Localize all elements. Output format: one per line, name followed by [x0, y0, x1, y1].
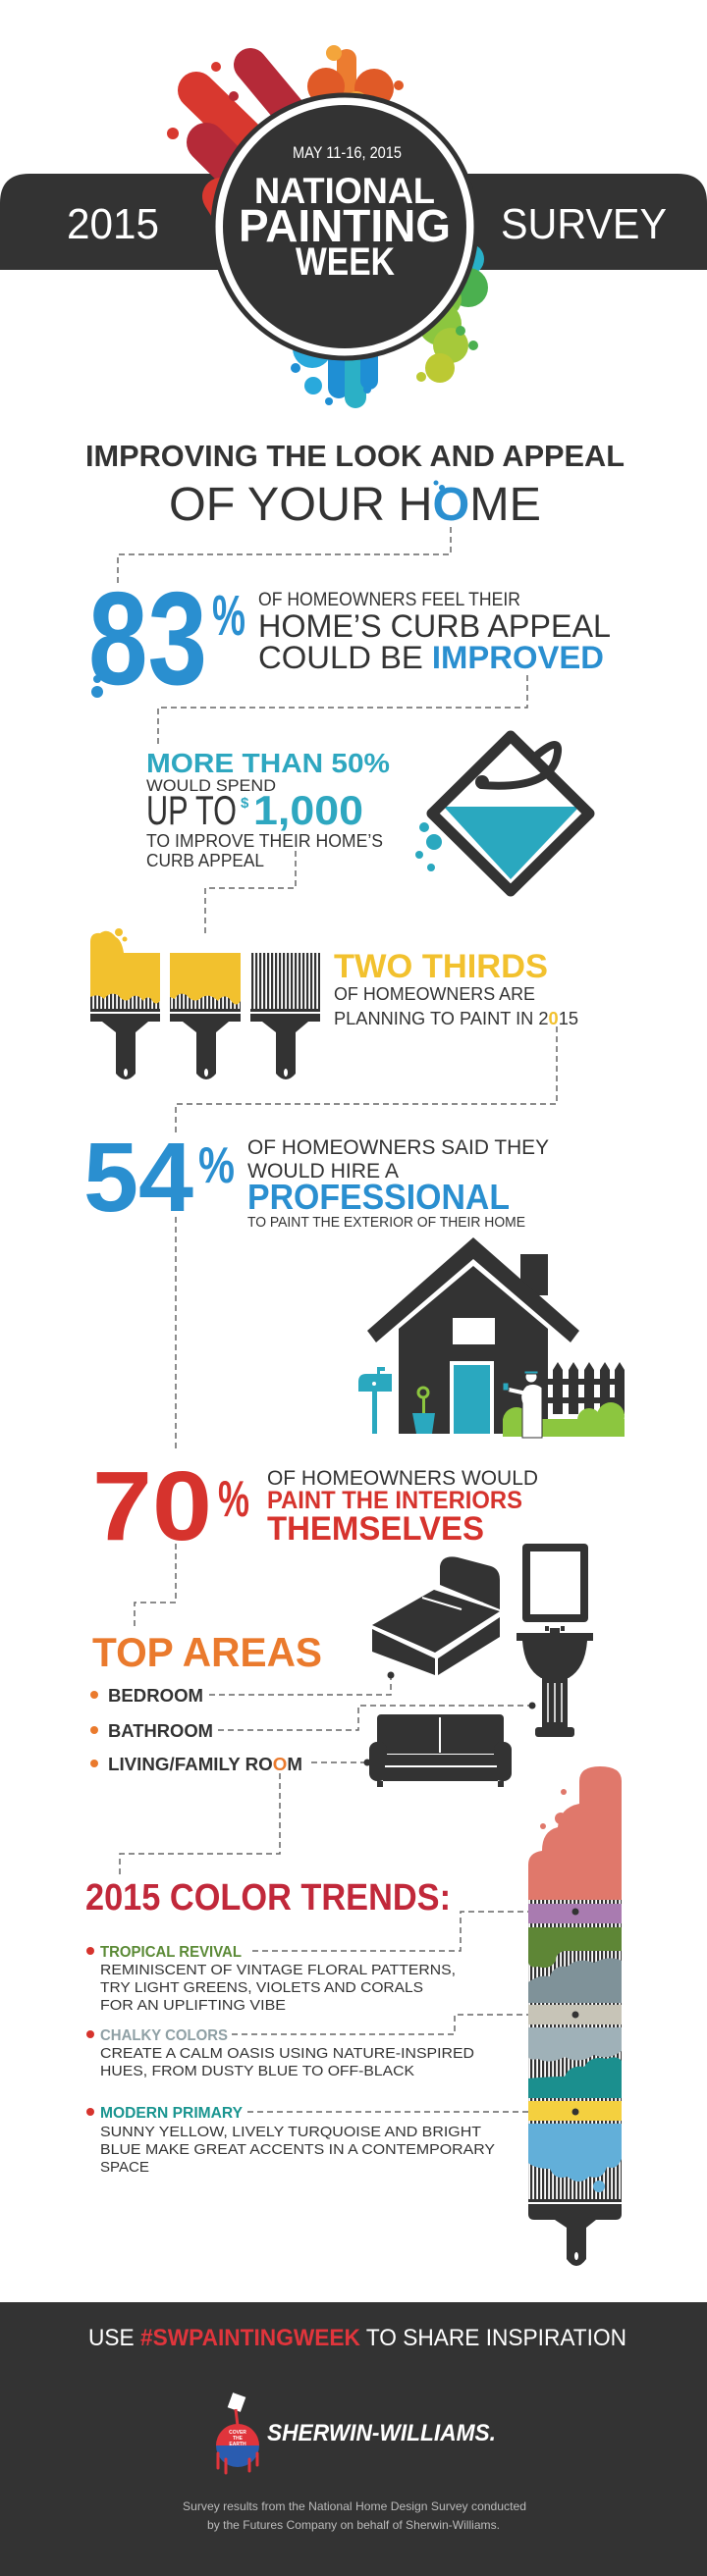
- footnote: [183, 2499, 526, 2532]
- logo splash: [167, 45, 488, 405]
- top areas list: TOP AREAS: [92, 1629, 322, 1675]
- stat 54%: WOULD HIRE A: [247, 1160, 399, 1183]
- color trend list: CHALKY COLORS: [100, 2027, 228, 2044]
- footer: [0, 2302, 707, 2576]
- stat 50%: UP TO: [146, 787, 237, 833]
- badge title: WEEK: [296, 240, 395, 284]
- section heading: IMPROVING THE LOOK AND APPEAL: [85, 439, 625, 473]
- top areas list: BEDROOM: [108, 1686, 203, 1706]
- sherwin-williams logo: EARTH: [229, 2442, 246, 2447]
- stat 54%: 54: [83, 1123, 193, 1233]
- stat 54%: PROFESSIONAL: [247, 1177, 510, 1217]
- stat 83%: HOME’S CURB APPEAL: [258, 608, 611, 644]
- stat 70%: PAINT THE INTERIORS: [267, 1487, 522, 1514]
- footnote: Survey results from the National Home Design Survey conducted: [183, 2499, 526, 2513]
- dashed connectors: [118, 527, 575, 2112]
- mailbox: [358, 1367, 392, 1434]
- stat 70%: 70: [92, 1451, 212, 1561]
- color trend list: MODERN PRIMARY: [100, 2105, 243, 2122]
- header text survey: SURVEY: [501, 200, 667, 248]
- top areas list: [90, 1629, 536, 1774]
- header band: [0, 174, 707, 270]
- header text 2015: 2015: [67, 200, 159, 248]
- color trend list: HUES, FROM DUSTY BLUE TO OFF-BLACK: [100, 2063, 414, 2079]
- color trend list: FOR AN UPLIFTING VIBE: [100, 1997, 286, 2014]
- stat 50%: MORE THAN 50%: [146, 748, 390, 778]
- icon: sofa: [369, 1714, 512, 1787]
- stat 83%: OF HOMEOWNERS FEEL THEIR: [258, 590, 520, 610]
- stat two thirds: [334, 948, 578, 1028]
- stat 83%: COULD BE IMPROVED: [258, 640, 604, 675]
- stat 50%: $: [241, 795, 249, 812]
- stat two thirds: PLANNING TO PAINT IN 2015: [334, 1009, 578, 1028]
- brand name: SHERWIN-WILLIAMS.: [267, 2420, 496, 2446]
- stat 54%: OF HOMEOWNERS SAID THEY: [247, 1136, 549, 1159]
- color trend list: SPACE: [100, 2159, 149, 2176]
- footnote: by the Futures Company on behalf of Sherwin-Williams.: [207, 2518, 500, 2532]
- sherwin-williams logo: [216, 2392, 259, 2473]
- stat 50%: [146, 748, 390, 870]
- top areas list: BATHROOM: [108, 1721, 213, 1741]
- stat two thirds: OF HOMEOWNERS ARE: [334, 984, 535, 1004]
- color trend list: [86, 1944, 495, 2176]
- stat 54%: %: [198, 1137, 235, 1194]
- sherwin-williams logo: THE: [233, 2436, 244, 2442]
- icon: bed: [372, 1556, 500, 1675]
- stat two thirds: TWO THIRDS: [334, 948, 548, 985]
- icon: three paint brushes: [90, 928, 320, 1079]
- stat 54%: [83, 1123, 549, 1233]
- stat 70%: OF HOMEOWNERS WOULD: [267, 1467, 538, 1490]
- icon: mirror and sink: [517, 1544, 593, 1737]
- icon: house with painter: [358, 1237, 625, 1438]
- badge title: [239, 171, 451, 284]
- stat 50%: WOULD SPEND: [146, 776, 276, 795]
- stat 54%: TO PAINT THE EXTERIOR OF THEIR HOME: [247, 1214, 525, 1231]
- color trend list: CREATE A CALM OASIS USING NATURE-INSPIRED: [100, 2045, 474, 2062]
- color trend list: BLUE MAKE GREAT ACCENTS IN A CONTEMPORARY: [100, 2141, 495, 2158]
- painter: [503, 1371, 542, 1438]
- color trend list: TRY LIGHT GREENS, VIOLETS AND CORALS: [100, 1979, 423, 1996]
- stat 83%: [88, 564, 611, 712]
- top areas list: LIVING/FAMILY RO OM: [108, 1755, 302, 1774]
- section heading: OF YOUR HOME: [169, 479, 541, 531]
- stat 70%: THEMSELVES: [267, 1510, 484, 1548]
- fence: [548, 1362, 625, 1414]
- color trend list: TROPICAL REVIVAL: [100, 1944, 242, 1961]
- sherwin-williams logo: COVER: [229, 2430, 246, 2436]
- stat 70%: [92, 1451, 538, 1561]
- icon: paint bucket: [415, 736, 589, 891]
- stat 50%: TO IMPROVE THEIR HOME’S: [146, 831, 383, 851]
- color trend list: REMINISCENT OF VINTAGE FLORAL PATTERNS,: [100, 1962, 456, 1978]
- badge date: MAY 11-16, 2015: [293, 143, 402, 162]
- stat 50%: 1,000: [253, 787, 363, 833]
- color trends heading: 2015 COLOR TRENDS:: [85, 1877, 451, 1919]
- icon: big color brush: [528, 1766, 622, 2266]
- color trend list: SUNNY YELLOW, LIVELY TURQUOISE AND BRIGHT: [100, 2124, 481, 2140]
- stat 50%: CURB APPEAL: [146, 851, 264, 870]
- section heading: [85, 439, 625, 531]
- flower pot: [412, 1388, 435, 1434]
- stat 83%: 83: [88, 564, 207, 712]
- logo badge: [213, 95, 476, 358]
- stat 83%: %: [212, 584, 245, 648]
- badge title: NATIONAL: [254, 171, 435, 211]
- bushes: [503, 1402, 625, 1437]
- stat 70%: %: [218, 1471, 249, 1528]
- hashtag line: USE #SWPAINTINGWEEK TO SHARE INSPIRATION: [88, 2325, 626, 2351]
- badge title: PAINTING: [239, 200, 451, 251]
